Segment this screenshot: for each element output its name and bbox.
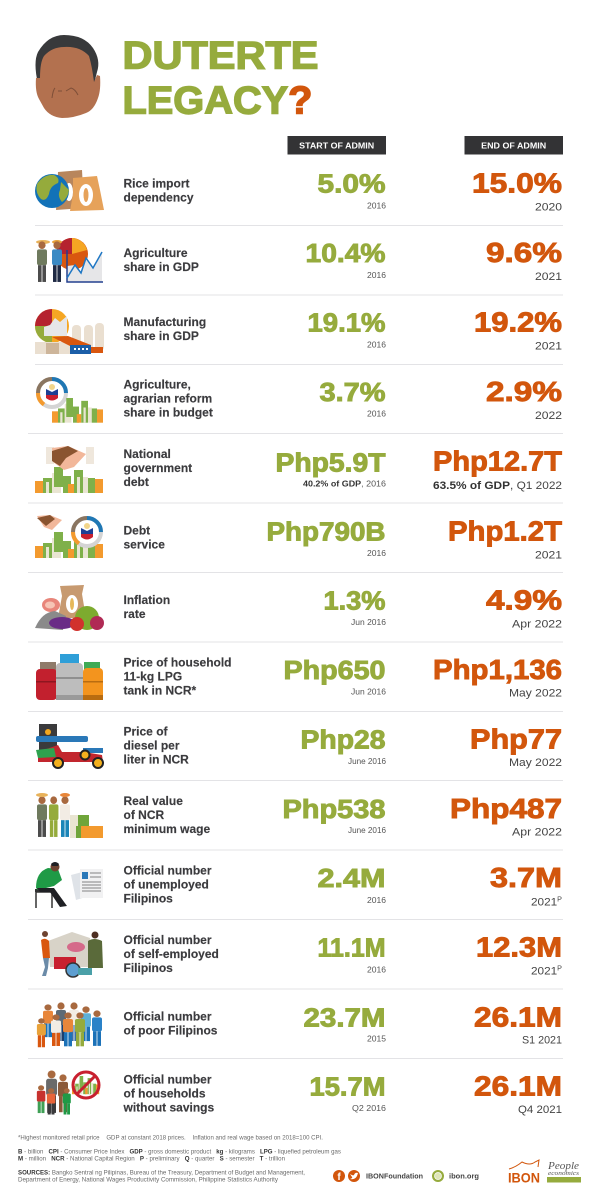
icon: website globe [432,1170,444,1182]
end year: 2021 [535,549,562,561]
label: Price of [124,725,169,739]
icon: handshake and money [35,446,103,493]
row: national government debt [35,446,562,493]
start year: 2016 [367,270,386,280]
label: tank in NCR* [124,683,197,697]
label: Agriculture, [124,378,191,392]
end note: 63.5% of GDP , Q1 2022 [433,480,562,492]
column header: start of admin: START OF ADMIN [299,140,374,150]
end value: Php1,136 [433,654,562,685]
end year: Apr 2022 [512,826,562,838]
row: rice import dependency [35,168,562,214]
label: Official number [124,1072,212,1086]
start value: 3.7% [320,379,386,407]
end value: 9.6% [486,237,562,268]
icon: seated man and newspapers [35,862,103,908]
icon: workers and money [36,793,103,838]
label: Debt [124,523,150,537]
label: share in GDP [124,260,199,274]
icon: pie chart and factory [35,309,104,354]
label: of poor Filipinos [124,1023,218,1037]
column header: end of admin [464,136,563,154]
end year: Q4 2021 [518,1104,562,1116]
end year: 2021 [535,340,562,352]
label: dependency [124,190,194,204]
end year: 2021 [535,271,562,283]
start value: 1.3% [324,588,386,616]
row: inflation rate [35,585,562,631]
end value: 12.3M [476,932,562,963]
label: Filipinos [124,892,173,906]
row: manufacturing share in GDP [35,306,562,354]
row: households without savings [37,1070,562,1116]
title [122,35,318,122]
label: of households [124,1086,206,1100]
start value: 5.0% [318,171,386,199]
logo: People Economics: People [547,1161,579,1172]
start year: Q2 2016 [352,1103,386,1113]
social links [333,1170,479,1183]
end year: 2021 [531,966,556,978]
footnotes: SOURCES: Bangko Sentral ng Pilipinas, Bureau of the Treasury, Department of Budget and Management, [18,1170,305,1176]
start value: Php5.9T [276,450,386,478]
footnotes [18,1134,341,1184]
label: Agriculture [124,246,188,260]
title: DUTERTE [122,35,318,78]
label: government [124,461,192,475]
start value: Php538 [282,796,386,824]
label: Price of household [124,655,232,669]
label: rate [124,607,146,621]
logo: People Economics [547,1161,581,1182]
label: National [124,447,171,461]
footnotes: Department of Energy, National Wages Productivity Commission, Philippine Statistics Authority [18,1176,279,1184]
start year: 2015 [367,1034,386,1044]
end year: May 2022 [509,688,562,700]
icon: facebook [333,1170,345,1183]
icon: rice sack, meat and vegetables [35,585,104,631]
label: share in GDP [124,329,199,343]
icon: handshake, budget ring and money [35,515,103,558]
label: 11-kg LPG [124,669,182,683]
row: poor Filipinos [37,1001,562,1047]
label: agrarian reform [124,392,212,406]
label: minimum wage [124,822,211,836]
icon: farmers, pie and line chart [36,238,103,282]
label: Inflation [124,593,170,607]
label: debt [124,475,149,489]
end year: Apr 2022 [512,618,562,630]
row: debt service [35,515,562,561]
start year: 2016 [367,200,386,210]
footnotes: B - billion CPI - Consumer Price Index GDP - gross domestic product kg - kilograms LPG - liquefied petroleum gas [18,1148,341,1156]
end value: 4.9% [486,585,562,616]
start year: 2016 [367,895,386,905]
start year: Jun 2016 [351,686,386,696]
start value: 23.7M [304,1004,386,1032]
label: share in budget [124,406,213,420]
label: diesel per [124,739,180,753]
icon: twitter [348,1170,360,1182]
label: without savings [122,1100,214,1114]
column header: end of admin: END OF ADMIN [481,140,546,150]
title: LEGACY? [122,79,312,122]
icon: street vendors and cart [41,931,103,977]
label: Filipinos [124,961,173,975]
footnotes: *Highest monitored retail price GDP at constant 2018 prices. Inflation and real wage based on 2018=100 CPI. [18,1134,323,1142]
start value: 10.4% [306,240,386,268]
label: Real value [124,794,183,808]
logo: People Economics: economics [548,1171,580,1177]
label: Manufacturing [124,315,206,329]
row: self-employed Filipinos [41,931,562,978]
label: of NCR [124,808,164,822]
end value: Php487 [450,793,562,824]
column header: start of admin [288,136,386,154]
row: price of diesel [36,723,562,769]
footnotes: M - million NCR - National Capital Region P - preliminary Q - quarter S - semester T - trillion [18,1156,285,1162]
end value: Php12.7T [433,446,562,476]
website: ibon.org [449,1172,479,1181]
start note: 40.2% of GDP , 2016 [303,478,386,488]
label: of self-employed [124,947,219,961]
end value: 26.1M [474,1070,562,1101]
start year: 2016 [367,339,386,349]
start value: Php28 [300,726,386,754]
end value: Php1.2T [448,515,562,546]
start value: 15.7M [310,1073,386,1101]
label: of unemployed [124,878,209,892]
start year: 2016 [367,548,386,558]
start value: Php650 [284,657,386,685]
end value: 2.9% [486,376,562,407]
start value: 11.1M [318,935,386,963]
logo: IBON: IBON [508,1170,540,1186]
label: Rice import [124,176,190,190]
start year: Jun 2016 [351,617,386,627]
start year: 2016 [367,964,386,974]
end value: Php77 [470,723,562,754]
start value: Php790B [266,518,386,546]
end value: 19.2% [474,306,562,337]
label: liter in NCR [124,753,189,767]
icon: facebook: f [337,1172,341,1183]
end year: 2020 [535,202,562,214]
social handle: IBONFoundation [366,1172,423,1181]
start value: 2.4M [318,865,386,893]
logo: IBON [508,1160,540,1186]
row: price of household LPG tank [36,654,562,700]
end year: 2021 [531,896,556,908]
start year: June 2016 [348,825,386,835]
label: Official number [124,1009,212,1023]
label: Official number [124,933,212,947]
end year: P [557,896,562,903]
row: agriculture, agrarian reform share in budget [38,376,562,423]
icon: budget ring and money [38,379,103,423]
end year: P [557,966,562,973]
icon: LPG tanks [36,654,103,700]
portrait: caricature head [36,35,100,118]
end year: S1 2021 [522,1034,562,1046]
end value: 3.7M [490,862,562,893]
end year: May 2022 [509,757,562,769]
end value: 26.1M [474,1001,562,1032]
icon: family and no-savings sign [37,1070,99,1115]
icon: globe and rice sacks [35,170,104,211]
start value: 19.1% [308,309,386,337]
label: service [124,537,165,551]
start year: 2016 [367,409,386,419]
label: Official number [124,864,212,878]
row: agriculture share in GDP [36,237,562,283]
end value: 15.0% [472,168,562,199]
row: real value of minimum wage [36,793,562,838]
row: unemployed Filipinos [35,862,562,908]
end year: 2022 [535,410,562,422]
icon: oil barrel and jeepney [36,724,103,768]
icon: crowd of people [37,1002,102,1047]
start year: June 2016 [348,756,386,766]
